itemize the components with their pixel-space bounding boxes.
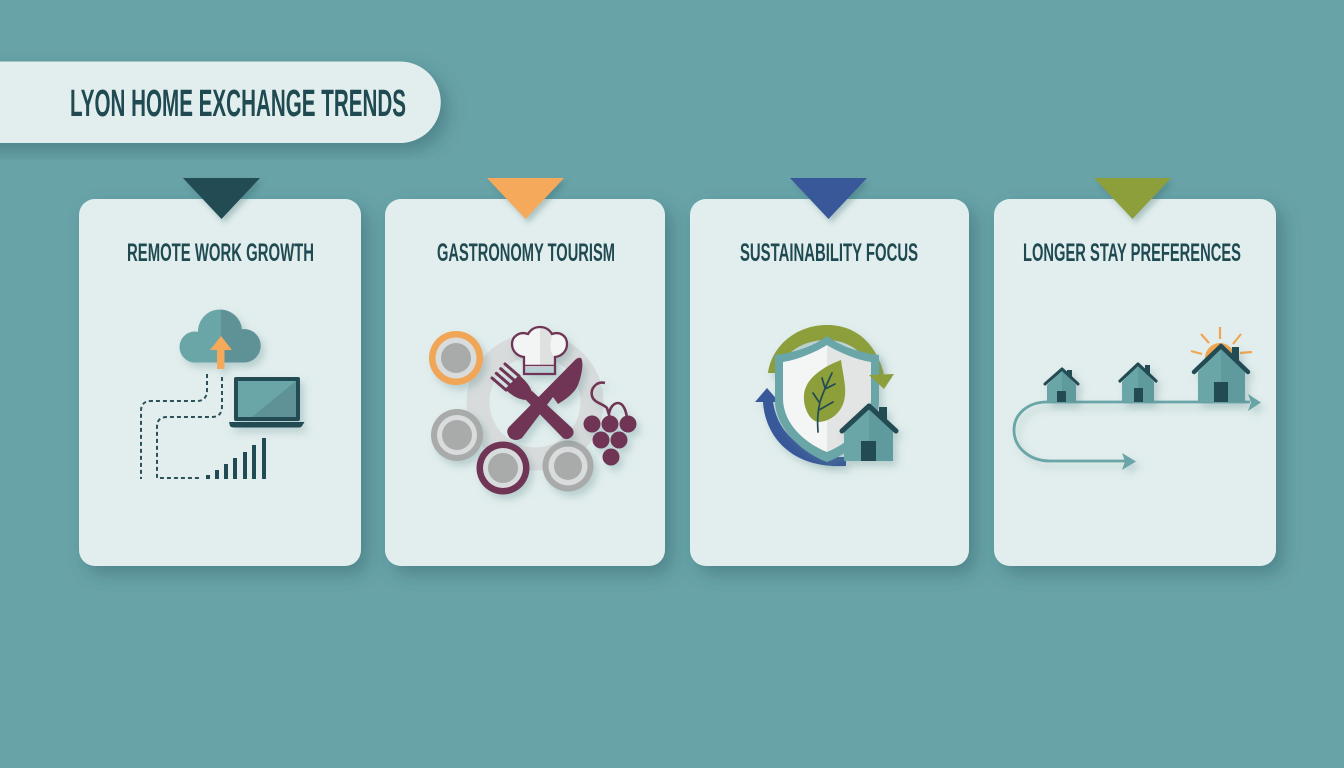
panel: longer stay preferences — [994, 178, 1276, 566]
panel: sustainability focus — [690, 178, 969, 566]
marker triangle: orange — [487, 178, 564, 219]
icon: large house — [1194, 346, 1248, 402]
panel: remote work growth — [79, 178, 361, 566]
heading: remote work growth: REMOTE WORK GROWTH — [127, 239, 314, 267]
icon: chef hat — [512, 327, 567, 374]
timeline arrow — [1014, 394, 1261, 470]
heading: gastronomy tourism: GASTRONOMY TOURISM — [437, 239, 615, 267]
icon: grey plate right — [542, 440, 594, 492]
icon: crossed fork and knife — [492, 358, 582, 440]
marker triangle: dark teal — [183, 178, 260, 219]
marker triangle: olive — [1094, 178, 1171, 219]
icon: house — [842, 406, 896, 461]
panel: gastronomy tourism — [385, 178, 665, 566]
bar chart: signal growth — [206, 438, 266, 479]
icon: small house — [1045, 369, 1078, 402]
marker triangle: blue — [790, 178, 867, 219]
icon: grapes — [584, 383, 636, 466]
icon: medium house — [1120, 364, 1156, 402]
icon: blue cycle arrow — [755, 388, 846, 466]
heading: sustainability focus: SUSTAINABILITY FOCUS — [740, 239, 918, 267]
title banner — [0, 62, 441, 143]
icon: olive arrowhead — [869, 374, 894, 389]
icon: orange plate — [429, 331, 483, 385]
icon: olive cycle arc — [768, 325, 884, 376]
title banner: LYON HOME EXCHANGE TRENDS — [70, 83, 406, 125]
dashed data paths — [141, 374, 222, 479]
icon: plum plate — [476, 442, 530, 494]
plate ring backdrop — [478, 345, 592, 459]
icon: laptop — [229, 377, 304, 428]
icon: sun rays — [1191, 327, 1252, 373]
icon: grey plate left — [431, 409, 483, 461]
icon: cloud upload — [179, 309, 261, 369]
icon: shield with leaf — [775, 336, 879, 462]
